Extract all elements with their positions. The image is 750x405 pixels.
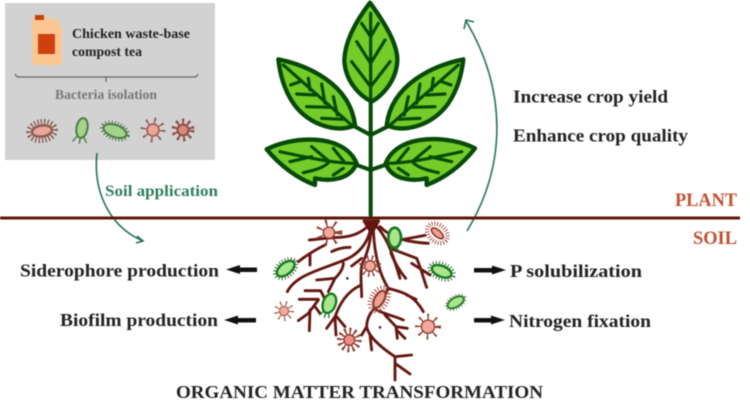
arrow: siderophore bbox=[226, 265, 257, 274]
label: bacteria isolation: Bacteria isolation bbox=[55, 88, 157, 103]
leaf: top bbox=[344, 3, 397, 102]
bacteria around roots bbox=[271, 220, 468, 348]
bacterium: green top centre bbox=[388, 228, 401, 252]
leaf: upper right bbox=[387, 59, 463, 128]
label: organic matter transformation: ORGANIC MATTER TRANSFORMATION bbox=[176, 382, 543, 402]
label: increase crop yield: Increase crop yield bbox=[513, 86, 668, 106]
icon: isolated bacterium 5 bbox=[176, 122, 190, 138]
leaf: lower left bbox=[267, 140, 357, 185]
heading: chicken waste-base compost tea bbox=[72, 27, 190, 60]
leaf: lower right bbox=[386, 139, 475, 185]
icon: compost tea bottle bbox=[32, 15, 62, 65]
bacterium: centre rod bbox=[366, 284, 393, 314]
bacterium: pink top right bbox=[423, 220, 451, 247]
icon: isolated bacterium 3 bbox=[100, 120, 130, 142]
bacterium: green lower left bbox=[318, 292, 339, 320]
roots bbox=[287, 221, 430, 380]
arrow: biofilm bbox=[224, 316, 256, 324]
label: siderophore production: Siderophore production bbox=[20, 260, 219, 280]
arrow: p solubilization bbox=[474, 266, 506, 274]
bracket bbox=[15, 74, 198, 82]
leaf: upper left bbox=[278, 59, 355, 128]
heading: chicken waste-base compost tea: compost tea bbox=[72, 45, 142, 60]
label: enhance crop quality: Enhance crop quality bbox=[513, 126, 688, 146]
stem bbox=[355, 100, 387, 215]
bacterium: top pink bbox=[320, 224, 338, 241]
bacterium: pink bottom bbox=[341, 332, 358, 348]
heading: chicken waste-base compost tea: Chicken waste-base bbox=[72, 27, 190, 42]
arrow: soil application bbox=[96, 153, 143, 243]
plant bbox=[267, 3, 475, 215]
label: plant: PLANT bbox=[675, 191, 738, 211]
bacterium: centre pink bbox=[362, 258, 378, 274]
bacterium: pink left bbox=[277, 304, 291, 318]
label: biofilm production: Biofilm production bbox=[60, 310, 218, 330]
bacterium: green left bbox=[271, 255, 300, 282]
label: soil application: Soil application bbox=[105, 183, 218, 200]
panel: compost tea and bacteria isolation bbox=[5, 3, 215, 160]
bacterium: green far right bbox=[444, 292, 468, 313]
icon: isolated bacterium 2 bbox=[72, 117, 91, 145]
arrow: nitrogen fixation bbox=[474, 316, 505, 324]
label: soil: SOIL bbox=[693, 229, 737, 249]
icon: isolated bacterium 4 bbox=[145, 122, 161, 138]
icon: isolated bacterium 1 bbox=[30, 122, 54, 140]
ground line bbox=[0, 216, 740, 220]
label: nitrogen fixation: Nitrogen fixation bbox=[509, 311, 651, 331]
label: p solubilization: P solubilization bbox=[510, 261, 642, 281]
bacterium: green right bbox=[427, 260, 456, 283]
arrow: plant benefit bbox=[464, 20, 497, 231]
bacterium: pink lower right bbox=[419, 318, 437, 335]
